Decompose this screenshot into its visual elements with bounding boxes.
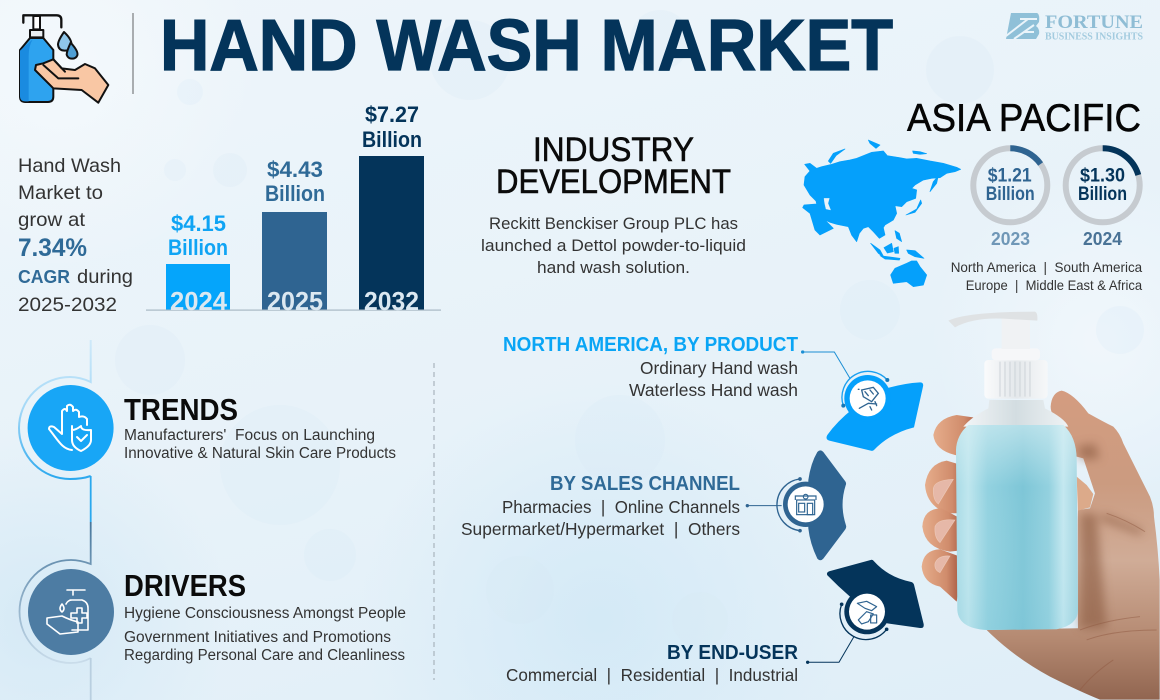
text: product list: Waterless Hand wash — [629, 380, 798, 400]
hand crease lines — [1080, 513, 1157, 690]
bar chart: market size — [146, 102, 441, 316]
text: drivers description: Government Initiatives and Promotions — [124, 629, 391, 646]
pump nozzle — [948, 312, 1037, 327]
CAGR text block: 7.34% — [18, 234, 87, 262]
icon: hand wash bottle and hand — [20, 15, 108, 103]
icon: blue wedge with hand washing — [801, 350, 923, 451]
bar chart: market size: $4.15 — [171, 211, 226, 236]
illustration: hand holding soap bottle — [922, 312, 1160, 700]
bar chart: market size: $7.27 — [365, 102, 419, 127]
heading: by end-user: BY END-USER — [667, 642, 799, 664]
donut chart: 2023: Billion — [986, 184, 1035, 205]
heading: trends: TRENDS — [124, 392, 238, 427]
text: drivers description — [124, 605, 406, 664]
bottle shading — [956, 425, 1078, 630]
heading: industry development — [496, 131, 731, 201]
segment: by end-user — [506, 560, 924, 685]
CAGR text block: 2025-2032 — [18, 294, 117, 316]
dashed divider — [433, 363, 435, 680]
heading: industry development: DEVELOPMENT — [496, 163, 731, 201]
bar chart: market size: Billion — [265, 181, 325, 206]
panel: trends — [28, 385, 396, 471]
icon: sanitizer and hand — [28, 569, 114, 655]
map: Asia Pacific — [803, 140, 961, 287]
bar chart: market size: 2024 — [170, 286, 228, 316]
text: other regions: North America | South America — [951, 259, 1142, 275]
text: end-user list: Commercial | Residential | Industrial — [506, 665, 798, 685]
pump top — [992, 348, 1040, 360]
logo: Fortune Business Insights — [1006, 12, 1143, 42]
bar chart: market size: Billion — [168, 235, 228, 260]
segment: north america by product — [503, 334, 923, 451]
donut chart: 2023: 2023 — [991, 229, 1030, 249]
donut chart: 2024: Billion — [1078, 184, 1127, 205]
segment: by sales channel — [461, 450, 846, 560]
text: product list: Ordinary Hand wash — [640, 358, 798, 378]
text: other regions — [951, 259, 1142, 293]
CAGR text block: CAGR — [18, 267, 70, 287]
CAGR text block — [18, 155, 133, 316]
bar chart: market size: Billion — [362, 127, 422, 152]
bar chart: market size: $4.43 — [267, 157, 323, 182]
donut chart: 2023 — [973, 148, 1047, 249]
icon: dark wedge with hands and sanitizer — [806, 560, 924, 664]
text: industry development description — [481, 214, 746, 277]
donut chart: 2024: $1.30 — [1080, 166, 1125, 187]
CAGR text block: Hand Wash — [18, 155, 121, 177]
text: sales channel list: Pharmacies | Online Channels — [502, 497, 740, 517]
text: drivers description: Hygiene Consciousness Amongst People — [124, 605, 406, 622]
collar — [984, 360, 1048, 399]
text: industry development description: hand wash solution. — [537, 258, 690, 277]
heading: industry development: INDUSTRY — [533, 131, 694, 169]
title: HAND WASH MARKET — [160, 6, 893, 86]
heading: by sales channel: BY SALES CHANNEL — [550, 473, 740, 495]
CAGR text block: during — [77, 266, 133, 288]
text: trends description: Manufacturers' Focus on Launching — [124, 427, 375, 444]
text: drivers description: Regarding Personal Care and Cleanliness — [124, 647, 405, 664]
panel: drivers — [28, 568, 406, 664]
fingernails — [933, 479, 955, 573]
text: trends description: Innovative & Natural Skin Care Products — [124, 445, 396, 462]
heading: Asia Pacific: ASIA PACIFIC — [907, 97, 1141, 140]
text: product list — [629, 358, 798, 400]
pump stem — [1002, 318, 1030, 349]
logo: Fortune Business Insights: FORTUNE — [1045, 12, 1143, 33]
CAGR text block: grow at — [18, 209, 86, 231]
bar chart: market size: 2032 — [364, 286, 419, 316]
divider beside logo — [132, 13, 134, 94]
text: industry development description: launched a Dettol powder-to-liquid — [481, 236, 746, 255]
shadow beside bottle and thumb — [1077, 443, 1143, 628]
donut chart: 2023: $1.21 — [988, 166, 1032, 187]
text: other regions: Europe | Middle East & Africa — [966, 277, 1142, 293]
CAGR text block: Market to — [18, 182, 103, 204]
timeline connector: trends and drivers — [19, 340, 91, 700]
text: sales channel list: Supermarket/Hypermarket | Others — [461, 519, 740, 539]
hand palm — [987, 391, 1160, 700]
logo: Fortune Business Insights: BUSINESS INSIGHTS — [1045, 32, 1143, 42]
text: industry development description: Reckitt Benckiser Group PLC has — [489, 214, 738, 233]
fingers — [922, 415, 980, 602]
bar chart: market size: 2025 — [267, 286, 323, 316]
heading: drivers: DRIVERS — [124, 568, 246, 603]
text: sales channel list — [461, 497, 740, 539]
donut chart: 2024: 2024 — [1083, 229, 1122, 249]
bottle neck and shoulder — [963, 400, 1068, 427]
icon: mid-blue wedge with pharmacy — [746, 450, 846, 560]
icon: hand with shield — [28, 385, 114, 471]
bottle body — [956, 425, 1078, 630]
heading: north america by product: NORTH AMERICA, BY PRODUCT — [503, 334, 798, 356]
index knuckle — [1077, 477, 1093, 511]
text: trends description — [124, 427, 396, 462]
donut chart: 2024 — [1066, 148, 1140, 249]
